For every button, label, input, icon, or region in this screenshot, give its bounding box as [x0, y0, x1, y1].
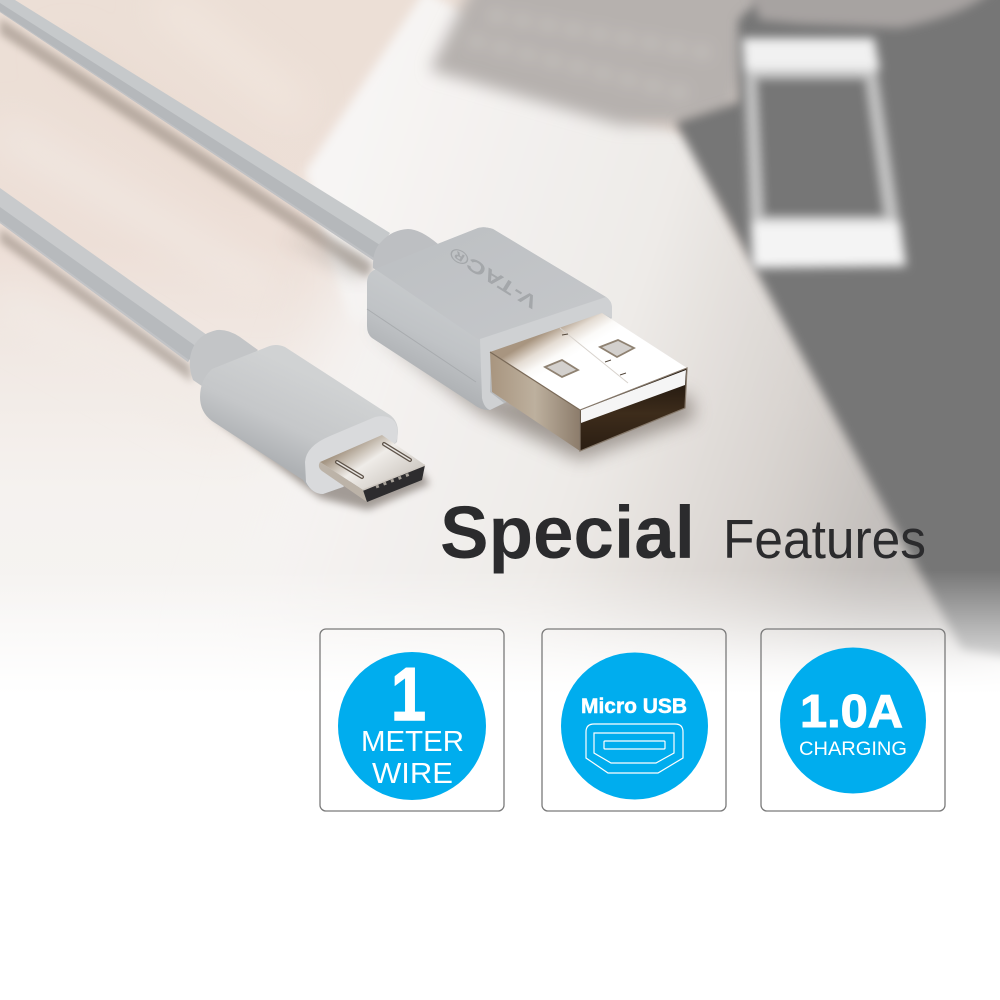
laptop palm rest upper: [305, 0, 800, 420]
icon: micro USB port: [586, 724, 683, 773]
housing: [200, 345, 398, 494]
length number: 1: [391, 652, 426, 736]
phone: [742, 38, 906, 268]
metal shell front: [580, 368, 687, 451]
wood streaks: [0, 0, 300, 430]
connector type label: Micro USB: [581, 695, 687, 718]
metal shell side: [490, 352, 580, 451]
feature card: Micro USB: [542, 629, 726, 811]
current value: 1.0A: [800, 685, 903, 737]
upper cable: [0, 0, 390, 260]
charging label: CHARGING: [799, 738, 907, 760]
strain relief: [373, 229, 438, 285]
dark laptop lid: [675, 0, 1000, 660]
plug holes: [545, 360, 578, 377]
USB-A connector: [367, 227, 687, 451]
icon: blue circle: [561, 652, 708, 800]
product photo: USB cable: [0, 0, 695, 510]
wire label: WIRE: [372, 758, 453, 790]
keyboard: [430, 0, 770, 125]
housing front face: [305, 416, 398, 494]
housing: [367, 227, 612, 410]
feature card: 1 meter wire: [320, 629, 504, 811]
metal plug: [320, 435, 425, 490]
lower cable: [0, 188, 207, 362]
cable shadows: [0, 18, 695, 510]
housing front lip: [480, 297, 612, 410]
micro USB connector: [190, 330, 425, 502]
brand mark: V-TAC®: [446, 243, 541, 313]
icon: blue circle: [780, 648, 926, 794]
laptop palm rest lower: [220, 240, 1000, 660]
feature card: 1.0A charging: [761, 629, 945, 811]
seam: [367, 309, 476, 382]
heading: Special Features: Features: [723, 508, 926, 570]
strain relief: [190, 330, 258, 395]
length label: METER: [361, 726, 464, 758]
icon: blue circle: [338, 652, 486, 800]
heading: Special Features: [440, 491, 926, 574]
metal shell top: [490, 313, 687, 410]
heading: Special Features: Special: [440, 491, 695, 574]
